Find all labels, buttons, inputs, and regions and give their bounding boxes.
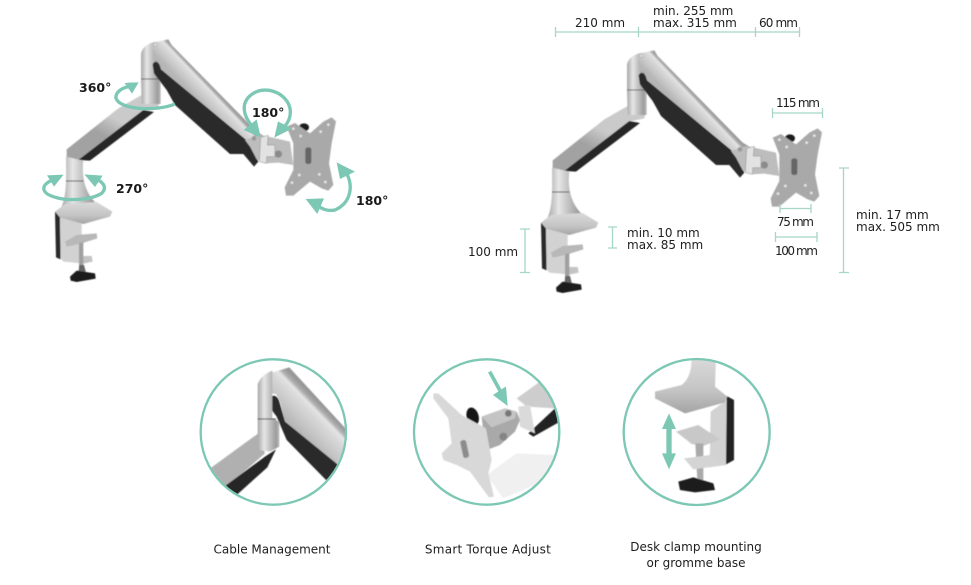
dimension: 100 mm VESA bracket bbox=[776, 232, 817, 242]
caption: cable management: Cable Management bbox=[214, 542, 331, 556]
dimension: clamp range bracket bbox=[608, 227, 617, 248]
right monitor arm illustration bbox=[541, 50, 822, 293]
dimension label: min 255 max 315 mm: min. 255 mm bbox=[653, 4, 733, 18]
label: 360 degrees: 360° bbox=[79, 80, 111, 95]
dimension label: 75 mm: 75 mm bbox=[777, 215, 814, 229]
dimension label: 60 mm: 60 mm bbox=[759, 16, 798, 30]
arrow: torque adjust pointer bbox=[490, 372, 508, 406]
arrow: 180 degree plate rotation bbox=[306, 162, 355, 214]
caption: smart torque adjust: Smart Torque Adjust bbox=[425, 542, 551, 556]
dimension label: min 10 max 85 mm: min. 10 mm bbox=[627, 226, 700, 240]
left monitor arm with rotation arrows bbox=[44, 39, 355, 282]
dimension label: min 17 max 505 mm: min. 17 mm bbox=[856, 208, 929, 222]
dimension label: min 17 max 505 mm: max. 505 mm bbox=[856, 220, 940, 234]
dimension label: min 255 max 315 mm: max. 315 mm bbox=[653, 16, 737, 30]
dimension label: 210 mm: 210 mm bbox=[575, 16, 625, 30]
arrow: clamp range bbox=[662, 413, 676, 469]
dimension label: min 10 max 85 mm: max. 85 mm bbox=[627, 238, 703, 252]
caption: desk clamp mounting or gromme base: or gromme base bbox=[647, 556, 745, 570]
arrow: 270 degree rotation bbox=[44, 174, 104, 200]
dimension label: 100 mm clamp: 100 mm bbox=[468, 245, 518, 259]
dimension: 75 mm bracket bbox=[780, 204, 811, 213]
dimension: clamp height bracket bbox=[520, 229, 530, 272]
panel: cable management circle bbox=[201, 359, 350, 505]
dimension: 115 mm bracket bbox=[772, 108, 822, 118]
label: 180 degrees rotation: 180° bbox=[356, 193, 388, 208]
panel: desk clamp circle bbox=[624, 357, 770, 505]
arrow: 360 degree rotation bbox=[116, 82, 175, 109]
label: 270 degrees: 270° bbox=[116, 181, 148, 196]
arrow: 180 degree tilt bbox=[244, 90, 292, 138]
dimension: total height bracket bbox=[839, 168, 849, 272]
dimension: top width lines bbox=[556, 27, 800, 37]
caption: desk clamp mounting or gromme base: Desk clamp mounting bbox=[630, 540, 762, 554]
label: 180 degrees tilt: 180° bbox=[252, 105, 284, 120]
dimension label: 100 mm VESA: 100 mm bbox=[775, 244, 818, 258]
monitor arm illustration bbox=[55, 39, 336, 282]
dimension label: 115 mm: 115 mm bbox=[776, 96, 820, 110]
panel: smart torque adjust circle bbox=[414, 359, 560, 505]
